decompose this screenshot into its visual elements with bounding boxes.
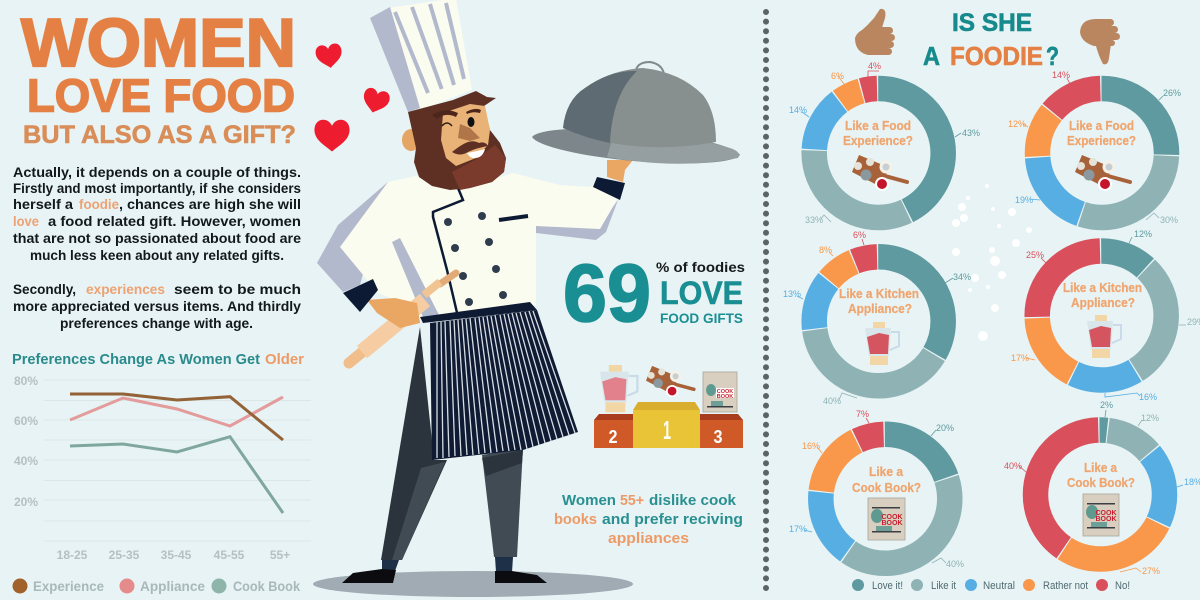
- y axis labels: 80%: [14, 374, 38, 388]
- heading: is she a foodie: A: [923, 41, 940, 71]
- x axis labels: 45-55: [214, 548, 245, 562]
- donut: kitchen appliance, thumbs up: 13%: [783, 289, 801, 299]
- chef illustration: [313, 0, 740, 597]
- x axis labels: [57, 548, 290, 562]
- intro text block: [13, 164, 301, 331]
- donut: cook book, thumbs down: 40%: [1004, 461, 1022, 471]
- x axis labels: 35-45: [161, 548, 192, 562]
- intro text block: love: [13, 213, 39, 229]
- x axis labels: 25-35: [109, 548, 140, 562]
- donut legend: Neutral: [983, 580, 1015, 592]
- icon: cook book: BOOK: [1096, 516, 1116, 523]
- x axis labels: 55+: [270, 548, 290, 562]
- donut: food experience, thumbs up: 14%: [789, 105, 807, 115]
- donut: cook book, thumbs up: 7%: [856, 409, 869, 419]
- heading: is she a foodie: [923, 9, 1059, 71]
- podium: 3: [714, 427, 722, 447]
- donut: food experience, thumbs up: Experience?: [843, 133, 913, 148]
- donut: kitchen appliance, thumbs down: Appliance?: [1071, 295, 1135, 310]
- chef head: [402, 91, 506, 190]
- donut: food experience, thumbs down: 30%: [1160, 215, 1178, 225]
- statistic: 69% of foodies love food gifts: LOVE: [660, 275, 743, 311]
- donut: cook book, thumbs down: 27%: [1142, 566, 1160, 576]
- donut: kitchen appliance, thumbs down: 2%: [1100, 400, 1113, 410]
- callout: women 55+: and prefer reciving: [602, 511, 743, 528]
- right cuff: [593, 177, 625, 200]
- series: experience: [70, 394, 283, 440]
- callout: women 55+: dislike cook: [649, 492, 737, 509]
- icon: cook book: BOOK: [882, 520, 902, 527]
- donut: kitchen appliance, thumbs up: 6%: [853, 230, 866, 240]
- shoes and socks: [342, 557, 547, 583]
- donut: kitchen appliance, thumbs up: 8%: [819, 245, 832, 255]
- callout: women 55+: 55+: [620, 492, 644, 509]
- trousers: [381, 327, 523, 560]
- intro text block: much less keen about any related gifts.: [30, 247, 284, 263]
- chart legend: [12, 578, 300, 594]
- decorative specks: [952, 184, 1032, 341]
- callout: women 55+: books: [554, 511, 597, 528]
- donut: kitchen appliance, thumbs down: 25%: [1026, 250, 1044, 260]
- intro text block: herself a: [13, 196, 73, 212]
- podium: [594, 365, 743, 448]
- donut: food experience, thumbs down: 26%: [1163, 88, 1181, 98]
- statistic: 69% of foodies love food gifts: % of foodies: [656, 259, 745, 275]
- title: BUT ALSO AS A GIFT?: [23, 121, 296, 149]
- donut: cook book, thumbs up: 20%: [936, 423, 954, 433]
- chart legend: Cook Book: [233, 578, 300, 594]
- donut: kitchen appliance, thumbs up: Appliance?: [848, 301, 912, 316]
- hand under cloche: [607, 160, 633, 182]
- donut: kitchen appliance, thumbs down: [1011, 229, 1200, 410]
- donut: kitchen appliance, thumbs down: 17%: [1011, 353, 1029, 363]
- donut: food experience, thumbs up: [789, 61, 980, 225]
- apron: [420, 302, 578, 460]
- donut: kitchen appliance, thumbs up: 34%: [953, 272, 971, 282]
- callout: women 55+: appliances: [608, 530, 689, 547]
- podium: 2: [608, 427, 618, 447]
- donut legend: Like it: [931, 580, 956, 592]
- intro text block: Actually, it depends on a couple of things.: [13, 164, 301, 180]
- donut: kitchen appliance, thumbs up: 40%: [823, 396, 841, 406]
- donut: kitchen appliance, thumbs up: Like a Kitchen: [839, 286, 919, 301]
- donut legend: Love it!: [872, 580, 903, 592]
- series: appliance: [70, 397, 283, 426]
- donut: food experience, thumbs up: 6%: [831, 71, 844, 81]
- donut: cook book, thumbs up: 17%: [789, 524, 807, 534]
- donut: food experience, thumbs down: 19%: [1015, 195, 1033, 205]
- x axis labels: 18-25: [57, 548, 88, 562]
- donut: kitchen appliance, thumbs up: [783, 230, 971, 406]
- donut: kitchen appliance, thumbs down: Like a Kitchen: [1063, 280, 1142, 295]
- line chart: preferences by age: [12, 351, 311, 594]
- icon: cook book: COOK: [882, 514, 902, 521]
- icon: food board: [1075, 155, 1130, 191]
- icon: cook book: [868, 498, 905, 540]
- donut: cook book, thumbs down: Like a: [1084, 460, 1118, 475]
- chart heading: Older: [265, 351, 304, 368]
- donut: cook book, thumbs up: [789, 409, 964, 569]
- icon: thumbs down: [1080, 19, 1120, 64]
- donut: cook book, thumbs up: Cook Book?: [852, 480, 921, 495]
- intro text block: more appreciated versus items. And thirdly: [13, 298, 301, 314]
- icon: cook book: [703, 372, 737, 412]
- donut: cook book, thumbs up: 40%: [946, 559, 964, 569]
- title: LOVE FOOD: [27, 70, 295, 122]
- statistic: 69% of foodies love food gifts: [563, 248, 745, 339]
- donut: cook book, thumbs down: [1004, 410, 1200, 576]
- donut: kitchen appliance, thumbs down: 12%: [1134, 229, 1152, 239]
- intro text block: , chances are high she will: [119, 196, 301, 212]
- donut legend: Rather not: [1043, 580, 1088, 592]
- icon: blender: [600, 365, 637, 412]
- donut: food experience, thumbs up: 33%: [805, 215, 823, 225]
- heading: is she a foodie: IS SHE: [952, 9, 1032, 37]
- statistic: 69% of foodies love food gifts: FOOD GIFTS: [660, 310, 743, 326]
- icon: blender: [1087, 315, 1121, 358]
- donut: cook book, thumbs down: 12%: [1141, 413, 1159, 423]
- donut: cook book, thumbs up: 16%: [802, 441, 820, 451]
- donut legend: [852, 579, 1130, 592]
- statistic: 69% of foodies love food gifts: 69: [563, 248, 651, 339]
- icon: blender: [865, 322, 899, 365]
- donut: food experience, thumbs down: Experience?: [1067, 133, 1136, 148]
- icon: cook book: BOOK: [717, 394, 733, 400]
- intro text block: preferences change with age.: [60, 315, 253, 331]
- donut: cook book, thumbs down: Cook Book?: [1067, 475, 1135, 490]
- donut: food experience, thumbs down: 14%: [1052, 70, 1070, 80]
- title: WOMEN: [21, 5, 296, 81]
- callout: women 55+: Women: [562, 492, 616, 509]
- intro text block: experiences: [86, 281, 165, 297]
- donut legend: No!: [1115, 580, 1130, 592]
- icon: cook book: COOK: [1096, 510, 1116, 517]
- podium: 1: [663, 415, 671, 445]
- donut: food experience, thumbs down: Like a Food: [1069, 118, 1134, 133]
- series: cook book: [70, 437, 283, 513]
- hearts: [314, 43, 391, 152]
- donut: food experience, thumbs up: 4%: [868, 61, 881, 71]
- heading: is she a foodie: ?: [1046, 41, 1059, 71]
- donut: food experience, thumbs up: Like a Food: [845, 118, 911, 133]
- intro text block: foodie: [79, 196, 119, 212]
- heading: is she a foodie: FOODIE: [950, 43, 1043, 71]
- cloche: [532, 62, 740, 164]
- intro text block: seem to be much: [174, 281, 301, 297]
- intro text block: that are not so passionated about food are: [13, 230, 301, 246]
- intro text block: a food related gift. However, women: [48, 213, 301, 229]
- chart heading: Preferences Change As Women Get: [12, 351, 260, 368]
- y axis labels: [14, 374, 38, 509]
- title: [21, 5, 296, 149]
- dotted divider: [763, 12, 769, 592]
- icon: cook book: [1083, 494, 1119, 536]
- y axis labels: 20%: [14, 495, 38, 509]
- intro text block: Firstly and most importantly, if she considers: [13, 180, 301, 196]
- callout: women 55+: [554, 492, 743, 547]
- icon: food board: [646, 366, 694, 397]
- jacket: [317, 173, 618, 320]
- donut: food experience, thumbs down: [1008, 70, 1181, 225]
- jacket buttons: [444, 212, 507, 306]
- icon: thumbs up: [855, 9, 895, 55]
- donut: food experience, thumbs up: 43%: [962, 128, 980, 138]
- y axis labels: 60%: [14, 414, 38, 428]
- chef hat: [370, 0, 472, 112]
- donut: kitchen appliance, thumbs down: 16%: [1139, 392, 1157, 402]
- icon: cook book: COOK: [717, 389, 733, 395]
- donut: food experience, thumbs down: 12%: [1008, 119, 1026, 129]
- chart legend: Appliance: [140, 578, 205, 594]
- chart legend: Experience: [33, 578, 104, 594]
- rolling pin and hand: [343, 273, 456, 363]
- donut: cook book, thumbs up: Like a: [869, 464, 904, 479]
- intro text block: Secondly,: [13, 281, 76, 297]
- y axis labels: 40%: [14, 454, 38, 468]
- icon: food board: [852, 155, 907, 191]
